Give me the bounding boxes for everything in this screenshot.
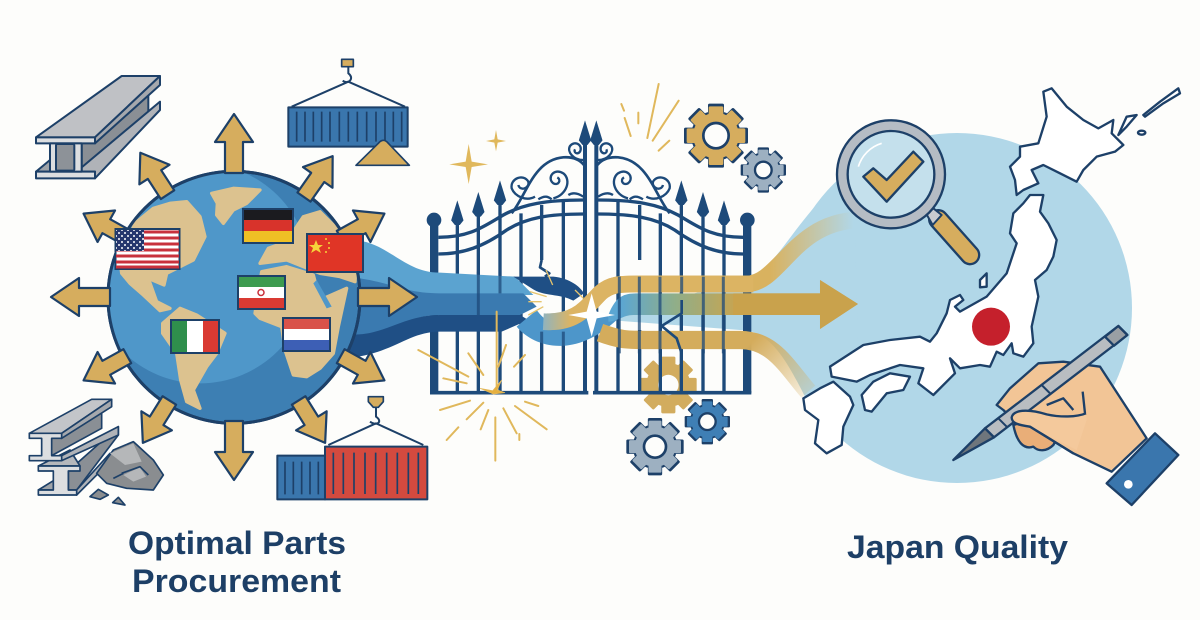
break sparks [528,270,583,315]
continents [120,188,357,408]
flag: Iran [238,276,285,309]
beam top left [36,76,160,178]
pale blue circle behind Japan [782,133,1132,483]
light blue cone [617,170,860,413]
magnifying glass with check [837,120,970,255]
central star burst [568,293,615,337]
pen [953,326,1127,460]
gear blue [685,399,730,444]
iron gate right leaf [592,126,751,393]
red circle [972,308,1010,346]
central arrow [608,280,858,329]
heading: Optimal Parts Procurement: Optimal Parts [128,525,346,561]
gear gold [684,104,748,168]
cuff [1107,433,1178,505]
gate post right [740,213,755,393]
containers bottom right [277,397,427,499]
iron gate left leaf [430,126,589,393]
hand back [997,362,1147,472]
gate post left [427,213,441,393]
rock [97,442,163,490]
globe [90,163,360,423]
container with crane and sand [288,59,409,165]
faded gold gear [640,357,697,413]
spark burst top right [621,84,679,151]
panel: Japan quality [803,88,1180,505]
panel: globe and procurement [29,59,427,505]
flag: China [307,234,363,272]
sparkles top left [449,130,506,184]
flag: Germany [243,209,293,243]
beams and rocks bottom left [29,399,163,505]
bars visible through flows [478,272,723,353]
thumb [1012,411,1087,450]
gear grey top [741,147,786,193]
flag: Italy [171,320,219,353]
gate crack [540,260,682,353]
flag: Netherlands [283,318,330,351]
panel: gate and flows [343,84,860,475]
flag: USA [116,229,180,269]
arrows around globe [51,114,417,480]
lower beam [38,427,118,495]
blue flow from globe [343,240,617,358]
lower fingers [1013,420,1060,450]
upper beam [29,399,118,461]
hand holding pen [953,326,1178,505]
map of Japan [803,88,1180,453]
heading: Japan Quality: Japan Quality [847,529,1068,565]
heading: Optimal Parts Procurement: Procurement [132,563,341,599]
spark burst bottom left [418,312,547,461]
gold upper flow [547,220,857,322]
finger lines [1047,392,1085,413]
gold lower flow [600,333,808,392]
gear grey bottom [626,418,684,475]
heading: Optimal Parts Procurement [128,525,346,599]
